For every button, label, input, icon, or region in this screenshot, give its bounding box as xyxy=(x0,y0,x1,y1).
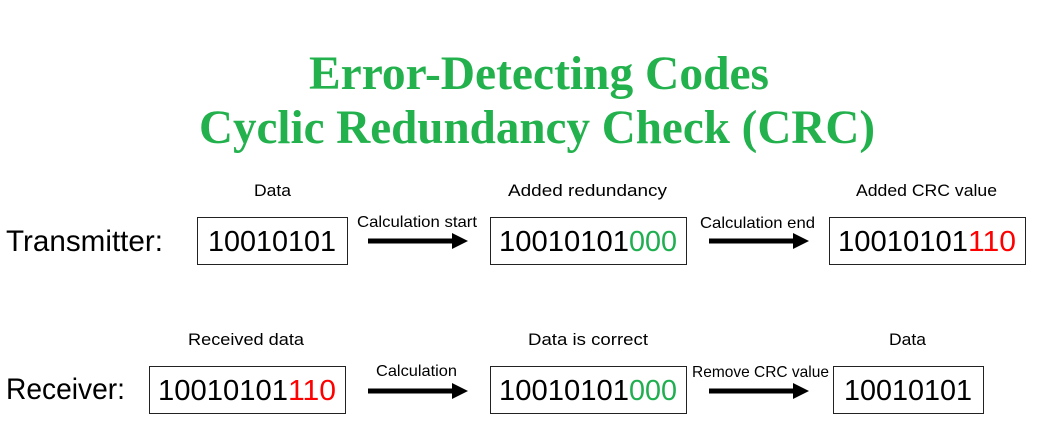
label: data: Data xyxy=(254,181,292,200)
label: received data: Received data xyxy=(188,330,305,349)
box: final data: 10010101 xyxy=(844,375,972,407)
arrow: calculation end xyxy=(709,233,809,249)
title xyxy=(199,47,875,154)
panel: transmitter row xyxy=(6,181,1026,264)
heading: transmitter: Transmitter: xyxy=(6,225,163,258)
box: added redundancy xyxy=(490,218,686,264)
label: data is correct: Data is correct xyxy=(528,330,648,349)
box: original data: 10010101 xyxy=(208,226,336,258)
box: added redundancy: 10010101 xyxy=(499,226,629,258)
box: added crc value: 110 xyxy=(968,226,1016,258)
box: final data xyxy=(834,366,984,414)
panel: receiver row xyxy=(6,330,984,414)
box: original data xyxy=(198,218,348,264)
title: Error-Detecting Codes xyxy=(309,47,769,100)
label: calculation: Calculation xyxy=(376,363,457,380)
arrow: calculation start xyxy=(368,233,468,249)
title: Cyclic Redundancy Check (CRC) xyxy=(199,101,875,154)
box: received data: 10010101 xyxy=(158,375,288,407)
label: added redundancy: Added redundancy xyxy=(508,181,668,200)
heading: receiver: Receiver: xyxy=(6,373,125,406)
label: calculation end: Calculation end xyxy=(700,215,815,232)
arrow: calculation xyxy=(368,383,468,399)
box: data is correct: 000 xyxy=(629,375,677,407)
arrow: remove crc value xyxy=(709,383,809,399)
box: data is correct: 10010101 xyxy=(499,375,629,407)
box: added redundancy: 000 xyxy=(629,226,677,258)
label: added crc value: Added CRC value xyxy=(856,181,997,200)
box: data is correct xyxy=(490,366,686,414)
label: final data: Data xyxy=(889,330,927,349)
box: added crc value xyxy=(830,218,1026,264)
box: received data: 110 xyxy=(288,375,336,407)
label: calculation start: Calculation start xyxy=(357,214,478,231)
box: received data xyxy=(150,366,346,414)
box: added crc value: 10010101 xyxy=(838,226,968,258)
label: remove crc value: Remove CRC value xyxy=(692,364,829,381)
